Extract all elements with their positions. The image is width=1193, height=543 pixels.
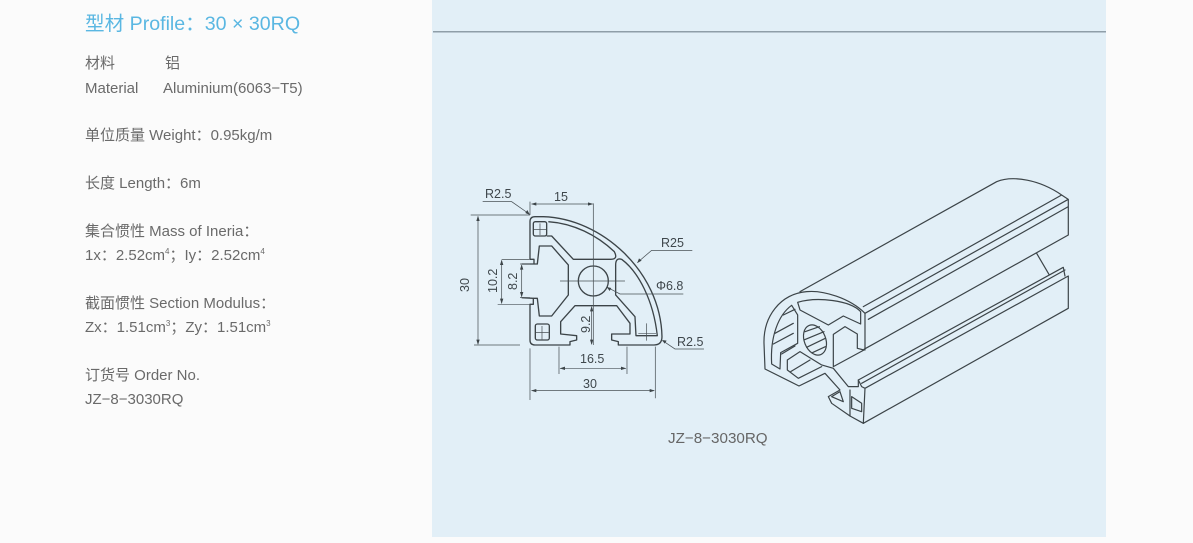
- title: 型材 Profile：30 × 30RQ: [85, 13, 300, 35]
- text: 铝: [165, 55, 180, 72]
- spec: mass of inertia: [85, 223, 265, 264]
- spec: material: Material: [85, 80, 138, 97]
- spec: section modulus: Zx：1.51cm3；Zy：1.51cm3: [85, 319, 271, 336]
- panel: drawing background: [432, 0, 1106, 537]
- dimension labels: 15: [554, 190, 568, 204]
- spec: material: 材料: [85, 55, 115, 72]
- spec: length: 长度 Length：6m: [85, 175, 201, 192]
- dimension labels: 8.2: [506, 273, 520, 290]
- dimension labels: 9.2: [579, 316, 593, 333]
- spec: section modulus: [85, 295, 275, 336]
- end face outline: [764, 291, 865, 423]
- spec: weight: 单位质量 Weight：0.95kg/m: [85, 127, 272, 144]
- end face cavities: [798, 300, 861, 325]
- extrusion long edges: [800, 179, 1068, 423]
- drawing caption: JZ−8−3030RQ: [668, 430, 768, 447]
- isometric profile drawing: [764, 179, 1068, 423]
- dimension labels: 30: [583, 377, 597, 391]
- dimension labels: Φ6.8: [656, 279, 683, 293]
- spec: mass of inertia: 集合惯性 Mass of Ineria：: [85, 223, 258, 240]
- text: Aluminium(6063−T5): [163, 80, 303, 97]
- spec: order number: JZ−8−3030RQ: [85, 391, 183, 408]
- spec: order number: [85, 367, 200, 408]
- dimension labels: 30: [458, 278, 472, 292]
- spec: order number: 订货号 Order No.: [85, 367, 200, 384]
- dimension labels: 10.2: [486, 269, 500, 293]
- spec: material: [85, 55, 303, 97]
- dimension labels: R2.5: [677, 335, 703, 349]
- panel divider line: [433, 31, 1106, 32]
- dimension labels: [458, 187, 703, 391]
- dimension lines: [471, 202, 704, 400]
- dimension labels: 16.5: [580, 352, 604, 366]
- dimension arrowheads: [476, 202, 667, 392]
- dimension labels: R2.5: [485, 187, 511, 201]
- spec: mass of inertia: 1x：2.52cm4；Iy：2.52cm4: [85, 247, 265, 264]
- dimension labels: R25: [661, 236, 684, 250]
- profile outline: [522, 217, 662, 345]
- cross-section drawing: [458, 187, 704, 400]
- spec: section modulus: 截面惯性 Section Modulus：: [85, 295, 275, 312]
